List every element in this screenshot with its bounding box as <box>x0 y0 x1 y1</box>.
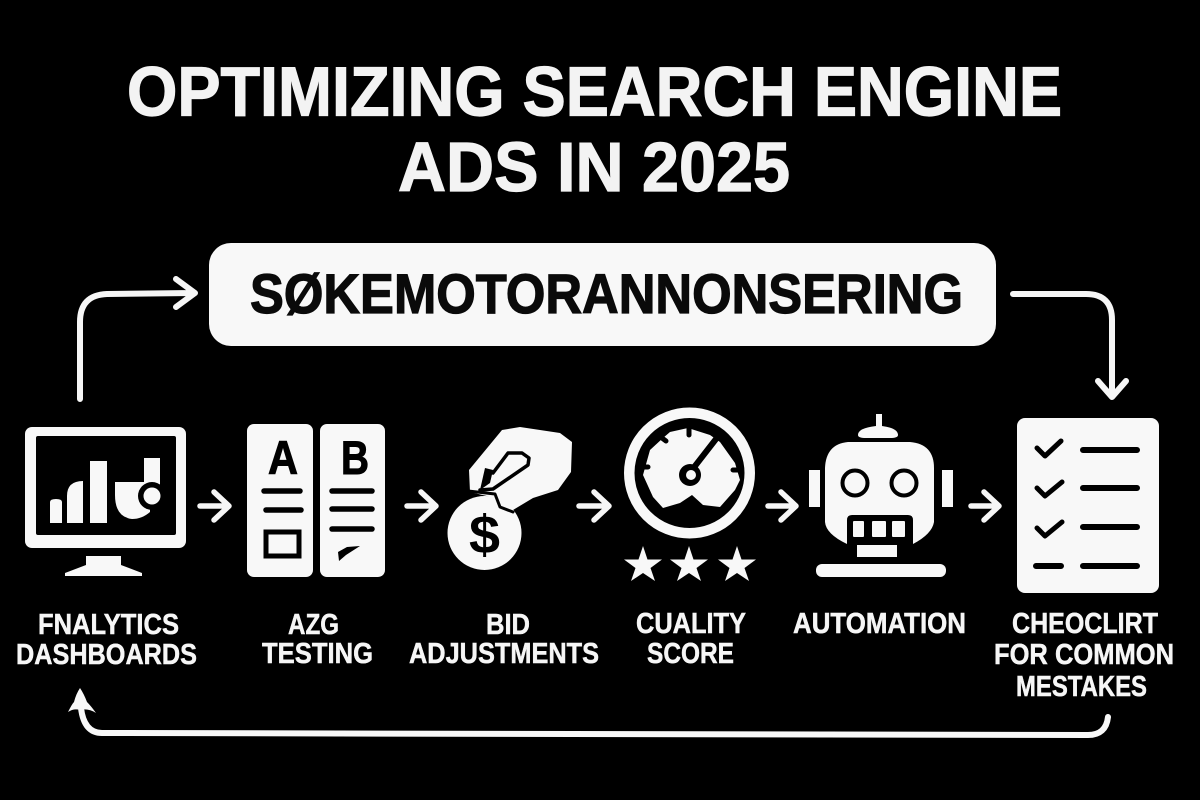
icon: bid adjustment hand and coin: $ <box>469 505 500 565</box>
label: automation: AUTOMATION <box>793 608 966 640</box>
icon: quality score gauge <box>624 413 756 581</box>
label: analytics dashboards: DASHBOARDS <box>16 639 197 671</box>
central banner: Søkemotorannonsering <box>209 243 996 346</box>
icon: A/B test pages: A <box>268 431 298 484</box>
arrow: step 3 to step 4 <box>579 492 609 520</box>
label: quality score: CUALITY <box>636 608 746 640</box>
label: analytics dashboards: FNALYTICS <box>38 609 179 641</box>
arrow: feedback loop from checklist to analytics <box>68 688 1108 735</box>
icon: A/B test pages <box>247 424 385 577</box>
icon: bid adjustment hand and coin <box>448 427 572 570</box>
label: checklist for common mistakes: CHEOCLIRT <box>1012 608 1158 640</box>
title: ADS IN 2025 <box>398 128 790 206</box>
label: quality score: SCORE <box>647 638 734 670</box>
arrow: step 4 to step 5 <box>768 492 796 520</box>
icon: analytics monitor <box>25 427 186 576</box>
label: checklist for common mistakes: FOR COMMON <box>994 639 1174 671</box>
label: analytics dashboards <box>16 609 197 671</box>
arrow: step 2 to step 3 <box>407 492 436 520</box>
label: checklist for common mistakes <box>994 608 1174 703</box>
arrow: banner down to checklist <box>1013 294 1126 397</box>
arrow: analytics up to banner <box>80 279 195 399</box>
label: A/B testing: TESTING <box>262 638 373 670</box>
label: quality score <box>636 608 746 670</box>
title: OPTIMIZING SEARCH ENGINE <box>127 52 1062 130</box>
label: A/B testing <box>262 609 373 670</box>
label: bid adjustments: BID <box>486 609 530 641</box>
icon: checklist <box>1017 418 1159 593</box>
arrow: step 5 to step 6 <box>971 492 999 520</box>
central banner: Søkemotorannonsering: SØKEMOTORANNONSERING <box>250 262 963 325</box>
icon: automation robot <box>809 414 953 577</box>
label: bid adjustments <box>409 609 599 670</box>
label: bid adjustments: ADJUSTMENTS <box>409 638 599 670</box>
title <box>127 52 1062 206</box>
label: checklist for common mistakes: MESTAKES <box>1016 671 1147 703</box>
arrow: step 1 to step 2 <box>200 492 229 520</box>
label: A/B testing: AZG <box>288 609 339 641</box>
icon: A/B test pages: B <box>341 431 369 484</box>
